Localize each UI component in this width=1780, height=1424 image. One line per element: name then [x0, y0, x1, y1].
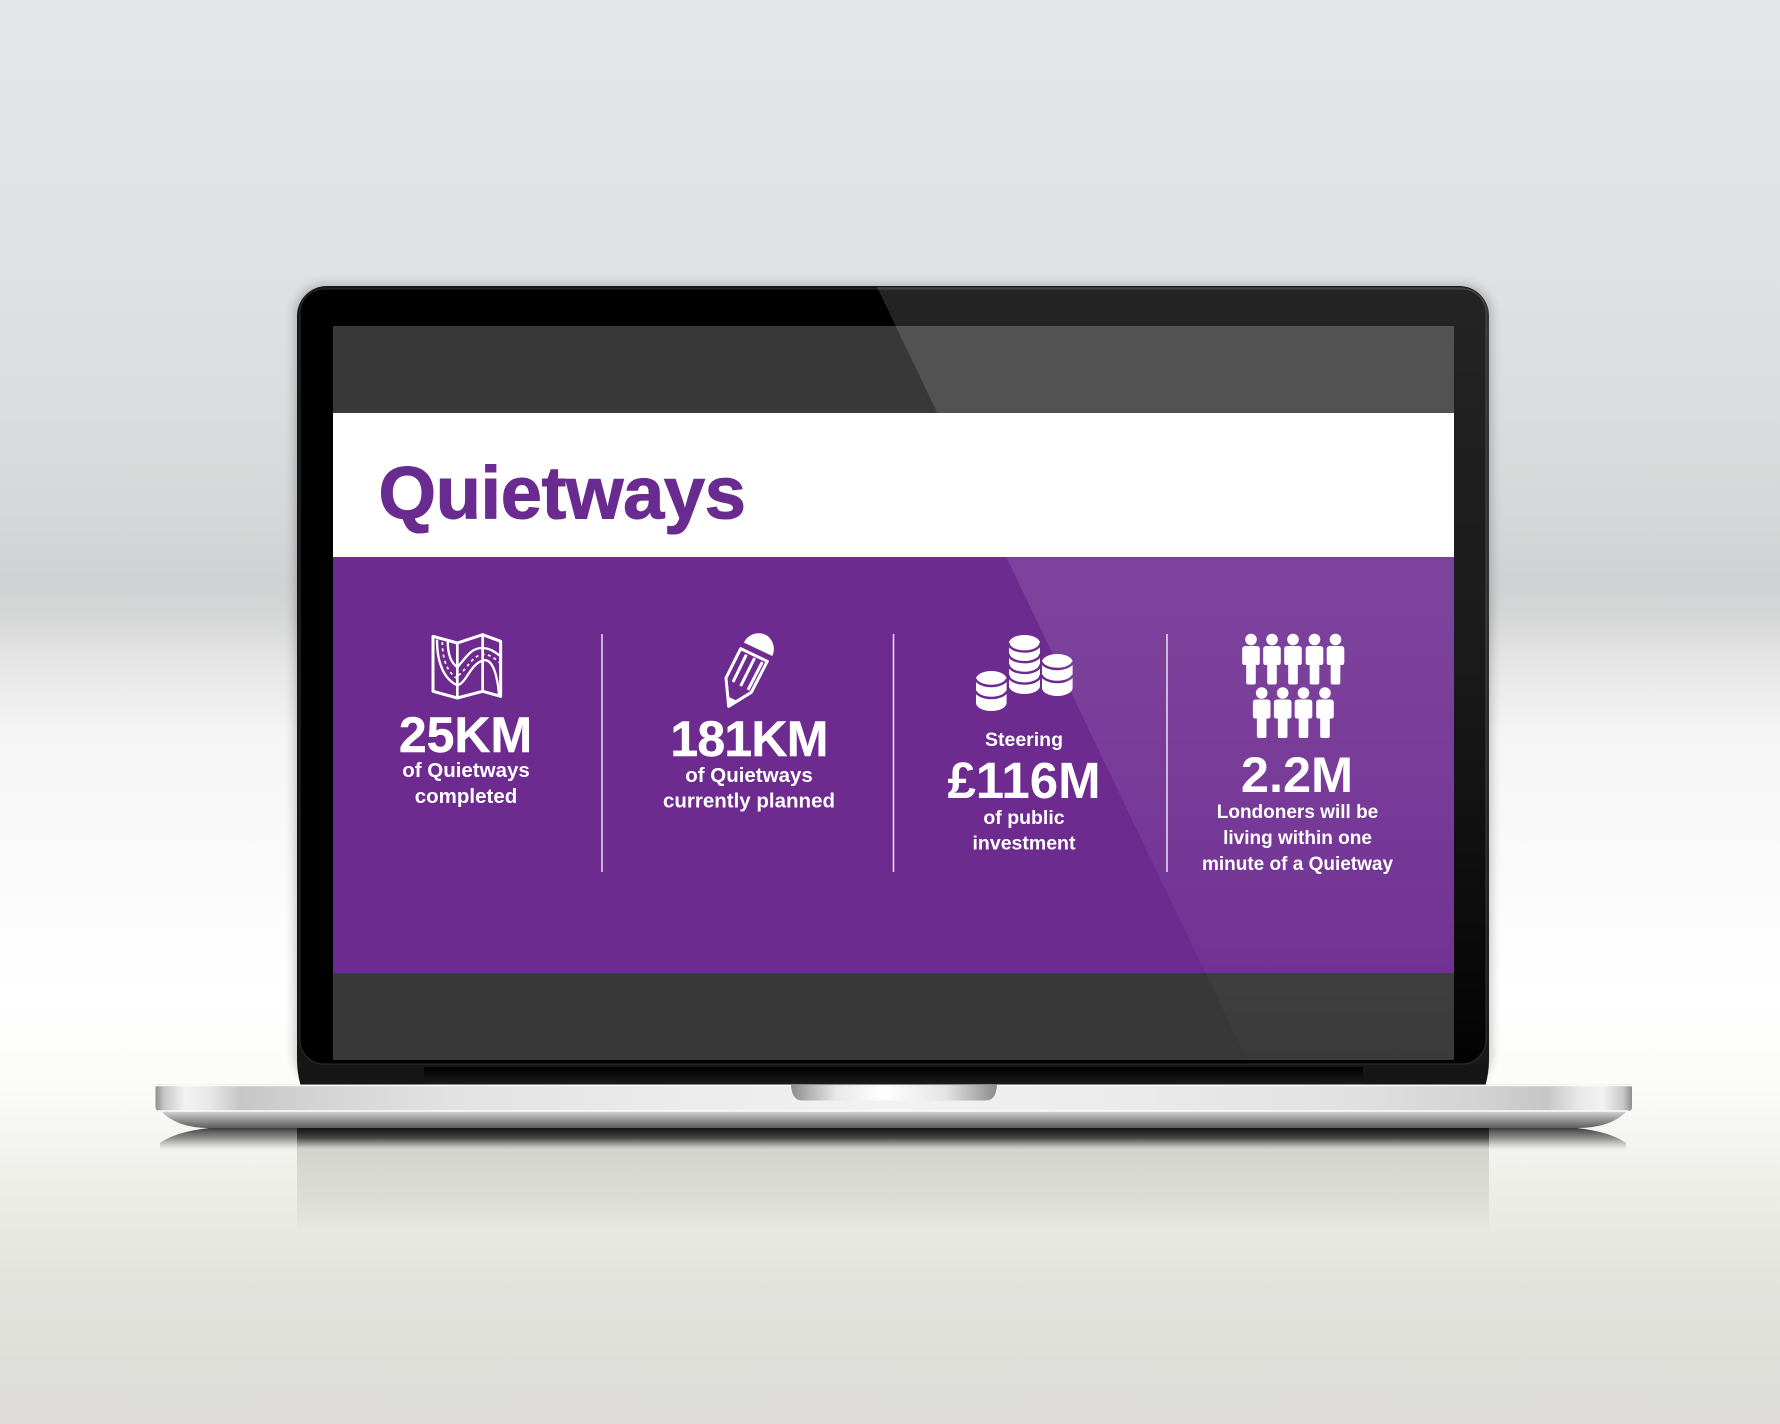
- title band: [333, 413, 1454, 557]
- caption: Londoners will be: [1217, 802, 1378, 823]
- icon: pencil: [726, 633, 774, 707]
- label above value: Steering: [985, 729, 1063, 751]
- laptop lid: [297, 286, 1489, 1085]
- purple panel: [333, 557, 1454, 973]
- value: 2.2M: [1241, 746, 1353, 803]
- caption: investment: [973, 832, 1076, 854]
- caption: currently planned: [663, 790, 835, 812]
- caption: of public: [983, 807, 1065, 829]
- screen: [333, 326, 1454, 1060]
- laptop reflection on surface: [297, 1128, 1489, 1230]
- icon: people: [1242, 634, 1344, 738]
- base underside: [160, 1110, 1628, 1128]
- value: £116M: [947, 752, 1101, 809]
- value: 25KM: [399, 707, 532, 763]
- top dark band: [333, 326, 1454, 413]
- stat: 181KM: [663, 633, 835, 812]
- stat: 2.2M: [1202, 634, 1393, 875]
- caption: of Quietways: [402, 759, 530, 782]
- caption: living within one: [1223, 828, 1372, 849]
- bottom dark band: [333, 973, 1454, 1060]
- caption: completed: [415, 785, 517, 808]
- title: Quietways: [378, 452, 746, 534]
- stat: 25KM: [399, 635, 532, 808]
- divider lines: [602, 634, 1167, 872]
- notch: [791, 1085, 997, 1100]
- value: 181KM: [670, 711, 828, 767]
- laptop lid shadow: [294, 284, 1492, 1084]
- screen glare: [877, 287, 1489, 1064]
- icon: coin stacks: [976, 635, 1073, 711]
- icon: map: [433, 635, 501, 698]
- hinge: [424, 1067, 1363, 1085]
- stat: £116M: [947, 635, 1101, 854]
- base front: [156, 1084, 1632, 1111]
- caption: of Quietways: [685, 764, 813, 787]
- shadow: [160, 1128, 1626, 1150]
- laptop base: [156, 1084, 1632, 1150]
- caption: minute of a Quietway: [1202, 854, 1393, 875]
